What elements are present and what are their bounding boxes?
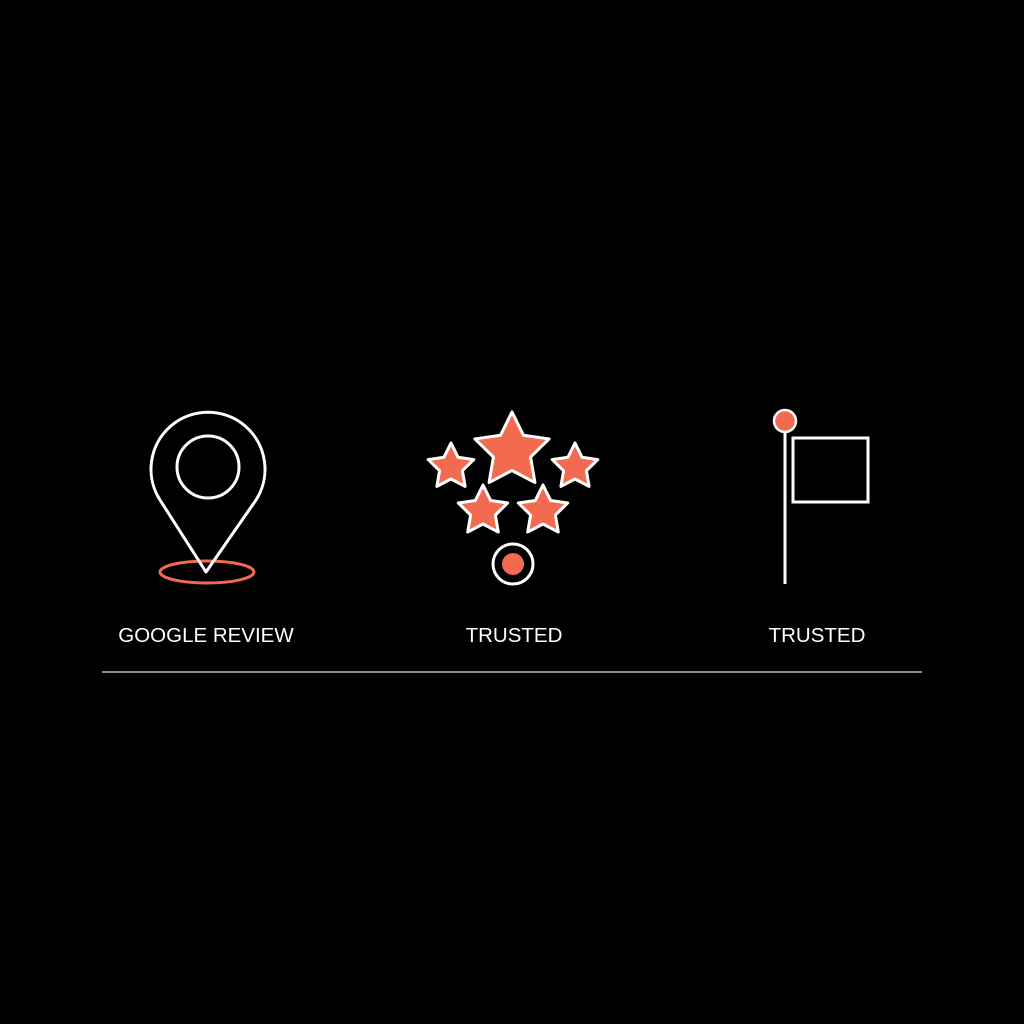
icon: five stars [428,412,598,584]
label: trusted (right): TRUSTED [769,624,865,647]
label: google review: GOOGLE REVIEW [118,624,294,647]
icon: location pin [151,412,265,583]
label: trusted (center): TRUSTED [466,624,562,647]
icon: flag [774,410,868,584]
